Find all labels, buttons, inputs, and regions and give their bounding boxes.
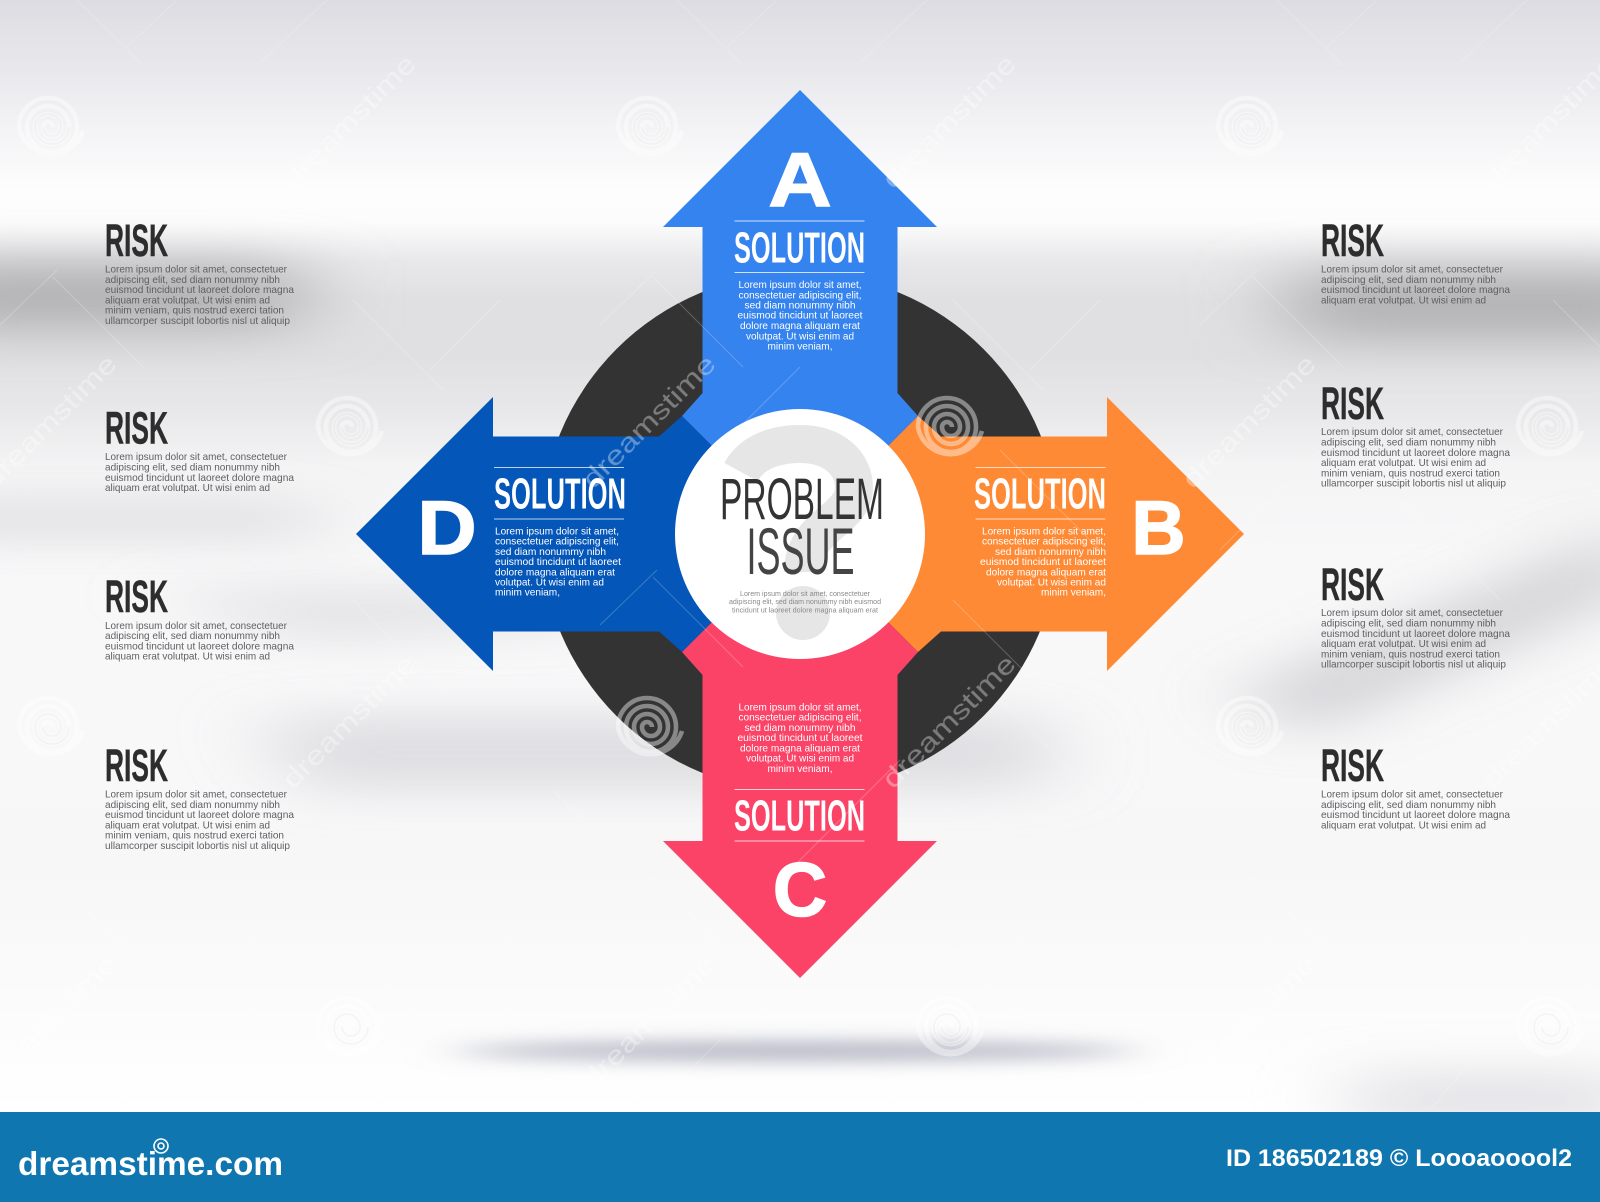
body text C: minim veniam, — [768, 763, 832, 775]
body text: Lorem ipsum dolor sit amet, consectetuer — [105, 620, 287, 632]
body text: euismod tincidunt ut laoreet dolore magna — [105, 640, 294, 652]
rule above heading — [494, 467, 624, 468]
heading: solution D: SOLUTION — [494, 470, 626, 519]
heading: RISK — [105, 215, 168, 266]
body text: ullamcorper suscipit lobortis nisl ut aliquip — [1321, 659, 1506, 671]
body text: ullamcorper suscipit lobortis nisl ut aliquip — [1321, 478, 1506, 490]
body text: euismod tincidunt ut laoreet dolore magna — [105, 472, 294, 484]
left risk block 4 — [105, 740, 294, 852]
body text: euismod tincidunt ut laoreet dolore magna — [105, 809, 294, 821]
small caption: adipiscing elit, sed diam nonummy nibh euismod — [729, 597, 881, 606]
rule below heading — [494, 518, 624, 520]
left risk block 3 — [105, 571, 294, 663]
heading: solution A: SOLUTION — [734, 223, 865, 272]
watermark: diagonal dreamstime text: dreamstime — [876, 49, 1022, 194]
body text C: dolore magna aliquam erat — [740, 743, 860, 755]
body text: aliquam erat volutpat. Ut wisi enim ad — [105, 651, 270, 663]
small caption — [729, 589, 881, 614]
body text B — [980, 526, 1106, 599]
body text: adipiscing elit, sed diam nonummy nibh — [105, 274, 280, 286]
arrow C: down, red — [663, 534, 937, 978]
body text A: consectetuer adipiscing elit, — [738, 289, 862, 301]
watermark: diagonal dreamstime text: dreamstime — [1176, 349, 1322, 494]
body text D: Lorem ipsum dolor sit amet, — [495, 526, 619, 538]
left risk block 2 — [105, 402, 294, 494]
watermark: spiral logos — [19, 98, 1582, 1054]
body text D: dolore magna aliquam erat — [495, 567, 615, 579]
body text: adipiscing elit, sed diam nonummy nibh — [1321, 799, 1496, 811]
body text: adipiscing elit, sed diam nonummy nibh — [1321, 274, 1496, 286]
body text: adipiscing elit, sed diam nonummy nibh — [1321, 618, 1496, 630]
heading: RISK — [1321, 215, 1384, 266]
center circle: problem issue — [675, 409, 925, 659]
heading: RISK — [105, 571, 168, 622]
heading: solution B: SOLUTION — [974, 470, 1106, 519]
body text A: dolore magna aliquam erat — [740, 320, 860, 332]
body text: euismod tincidunt ut laoreet dolore magna — [105, 284, 294, 296]
body text: minim veniam, quis nostrud exerci tation — [105, 830, 284, 842]
footer logo text: dreamstime.com — [18, 1145, 283, 1182]
icon: gray question mark — [741, 444, 854, 640]
body text B: euismod tincidunt ut laoreet — [980, 556, 1106, 568]
body text — [105, 788, 294, 852]
body text: aliquam erat volutpat. Ut wisi enim ad — [105, 819, 270, 831]
letter C: C — [773, 848, 827, 933]
letter B: B — [1132, 486, 1186, 571]
body text — [105, 620, 294, 663]
body text D: minim veniam, — [495, 587, 560, 599]
watermark: diagonal dreamstime text: dreamstime — [1476, 49, 1600, 194]
watermark: diagonal dreamstime text: dreamstime — [276, 649, 422, 794]
body text: adipiscing elit, sed diam nonummy nibh — [105, 799, 280, 811]
floor shadow under the diagram — [455, 1042, 1135, 1060]
right risk block 4 — [1321, 740, 1510, 831]
footer image id: ID 186502189 © Loooaooool2 — [1226, 1145, 1572, 1172]
body text: Lorem ipsum dolor sit amet, consectetuer — [1321, 607, 1503, 619]
body text: minim veniam, quis nostrud exerci tation — [1321, 467, 1500, 479]
letter A: A — [768, 138, 832, 223]
body text — [1321, 264, 1510, 306]
body text: ullamcorper suscipit lobortis nisl ut aliquip — [105, 840, 290, 852]
small caption: Lorem ipsum dolor sit amet, consectetuer — [740, 589, 870, 598]
body text — [1321, 788, 1510, 831]
body text: euismod tincidunt ut laoreet dolore magna — [1321, 809, 1510, 821]
body text A: sed diam nonummy nibh — [744, 300, 856, 312]
arrow D: left, dark blue — [356, 397, 800, 671]
body text: Lorem ipsum dolor sit amet, consectetuer — [1321, 264, 1503, 276]
body text A: euismod tincidunt ut laoreet — [738, 310, 863, 322]
body text D — [495, 526, 621, 599]
body text C: euismod tincidunt ut laoreet — [738, 732, 863, 744]
body text: euismod tincidunt ut laoreet dolore magna — [1321, 447, 1510, 459]
body text: euismod tincidunt ut laoreet dolore magna — [1321, 628, 1510, 640]
body text: Lorem ipsum dolor sit amet, consectetuer — [1321, 788, 1503, 800]
small caption: tincidunt ut laoreet dolore magna aliquam erat — [732, 605, 879, 614]
heading: RISK — [105, 402, 168, 454]
body text: aliquam erat volutpat. Ut wisi enim ad — [1321, 457, 1486, 469]
body text: aliquam erat volutpat. Ut wisi enim ad — [1321, 819, 1486, 831]
heading: solution C: SOLUTION — [734, 792, 865, 841]
watermark: diagonal dreamstime text: dreamstime — [1476, 649, 1600, 794]
body text C — [738, 702, 863, 775]
body text: Lorem ipsum dolor sit amet, consectetuer — [1321, 426, 1503, 438]
body text: aliquam erat volutpat. Ut wisi enim ad — [105, 482, 270, 494]
right risk block 2 — [1321, 378, 1510, 490]
body text D: sed diam nonummy nibh — [495, 546, 606, 558]
heading: RISK — [1321, 559, 1384, 610]
body text: adipiscing elit, sed diam nonummy nibh — [105, 630, 280, 642]
body text — [1321, 426, 1510, 490]
body text D: euismod tincidunt ut laoreet — [495, 556, 621, 568]
footer bar — [0, 1112, 1600, 1202]
body text: adipiscing elit, sed diam nonummy nibh — [105, 462, 280, 474]
watermark: diagonal dreamstime text: dreamstime — [576, 949, 722, 1094]
body text B: consectetuer adipiscing elit, — [982, 536, 1106, 548]
body text C: consectetuer adipiscing elit, — [738, 712, 862, 724]
footer logo spiral — [154, 1139, 168, 1153]
body text: Lorem ipsum dolor sit amet, consectetuer — [105, 264, 287, 276]
rule below heading — [976, 518, 1106, 520]
title: problem: PROBLEM — [720, 467, 884, 532]
body text C: Lorem ipsum dolor sit amet, — [738, 702, 862, 714]
body text D: consectetuer adipiscing elit, — [495, 536, 619, 548]
rule below heading — [734, 840, 864, 842]
body text: aliquam erat volutpat. Ut wisi enim ad — [1321, 638, 1486, 650]
watermark: diagonal dreamstime text: dreamstime — [876, 649, 1022, 794]
body text B: volutpat. Ut wisi enim ad — [997, 577, 1106, 589]
body text — [105, 451, 294, 494]
rule below heading — [734, 272, 864, 273]
body text: aliquam erat volutpat. Ut wisi enim ad — [1321, 294, 1486, 306]
right risk block 1 — [1321, 215, 1510, 306]
right risk block 3 — [1321, 559, 1510, 671]
dark ring behind the arrows — [540, 273, 1060, 792]
body text A — [738, 279, 863, 353]
left risk block 1 — [105, 215, 294, 327]
body text: aliquam erat volutpat. Ut wisi enim ad — [105, 294, 270, 306]
heading: RISK — [1321, 740, 1384, 791]
body text — [1321, 607, 1510, 671]
heading: RISK — [105, 740, 168, 791]
heading: RISK — [1321, 378, 1384, 429]
body text B: Lorem ipsum dolor sit amet, — [982, 526, 1106, 538]
body text: ullamcorper suscipit lobortis nisl ut aliquip — [105, 315, 290, 327]
body text: euismod tincidunt ut laoreet dolore magna — [1321, 284, 1510, 296]
body text A: volutpat. Ut wisi enim ad — [746, 330, 854, 342]
watermark: diagonal dreamstime text: dreamstime — [1176, 949, 1322, 1094]
arrow A: up, blue — [663, 90, 937, 534]
body text A: Lorem ipsum dolor sit amet, — [738, 279, 862, 291]
rule above heading — [976, 467, 1106, 468]
title: issue: ISSUE — [746, 514, 854, 588]
body text A: minim veniam, — [768, 341, 832, 353]
body text: minim veniam, quis nostrud exerci tation — [105, 305, 284, 317]
body text: Lorem ipsum dolor sit amet, consectetuer — [105, 451, 287, 463]
body text C: volutpat. Ut wisi enim ad — [746, 753, 854, 765]
letter D: D — [418, 486, 476, 571]
watermark: diagonal dreamstime text: dreamstime — [576, 349, 722, 494]
body text B: dolore magna aliquam erat — [986, 567, 1106, 579]
watermark: diagonal dreamstime text: dreamstime — [276, 49, 422, 194]
body text: Lorem ipsum dolor sit amet, consectetuer — [105, 788, 287, 800]
body text B: minim veniam, — [1041, 587, 1106, 599]
body text D: volutpat. Ut wisi enim ad — [495, 577, 604, 589]
body text: adipiscing elit, sed diam nonummy nibh — [1321, 436, 1496, 448]
body text — [105, 264, 294, 327]
rule above heading — [734, 789, 864, 790]
body text C: sed diam nonummy nibh — [744, 722, 856, 734]
arrow B: right, orange — [800, 397, 1244, 671]
body text B: sed diam nonummy nibh — [995, 546, 1106, 558]
rule above heading — [734, 220, 864, 222]
body text: minim veniam, quis nostrud exerci tation — [1321, 648, 1500, 660]
